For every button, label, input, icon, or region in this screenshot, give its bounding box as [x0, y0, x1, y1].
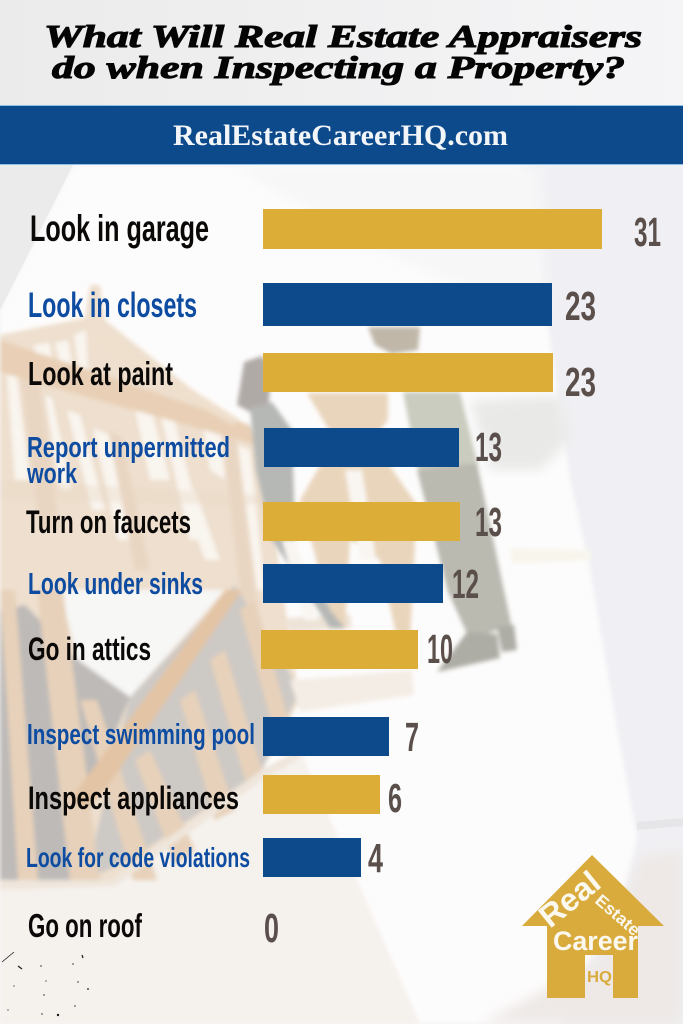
logo: Real Estate Career HQ house: Estate: [591, 891, 644, 940]
row: report unpermitted work: Report unpermitted: [27, 432, 230, 464]
row: look at paint: [28, 353, 596, 405]
logo: Real Estate Career HQ house: Career: [553, 926, 638, 956]
row: inspect swimming pool: 7: [405, 714, 419, 760]
row: look under sinks: 12: [452, 561, 479, 607]
title: [44, 18, 642, 85]
row: look for code violations: [26, 835, 383, 881]
woman with dark hair: [237, 356, 272, 412]
row: look in garage: Look in garage: [30, 208, 209, 249]
row: look in closets: [28, 283, 596, 329]
row: look at paint: 23: [565, 359, 596, 405]
row: turn on faucets: [26, 499, 502, 545]
row: go in attics: 10: [427, 626, 453, 672]
row: look at paint: Look at paint: [28, 355, 173, 392]
row: go on roof: [28, 905, 279, 951]
logo: Real Estate Career HQ house: [522, 855, 664, 998]
website banner: [0, 105, 683, 165]
man in work clothes: [368, 327, 420, 354]
bar chart: [26, 208, 661, 951]
row: look for code violations: Look for code violations: [26, 842, 250, 873]
light beam on wall and floor: [0, 165, 637, 1024]
row: inspect swimming pool: Inspect swimming pool: [27, 719, 255, 751]
logo: Real Estate Career HQ house: HQ: [587, 969, 612, 986]
website banner: RealEstateCareerHQ.com: [173, 119, 508, 152]
row: inspect appliances: Inspect appliances: [28, 780, 239, 816]
row: go in attics: [28, 626, 453, 672]
logo: Real Estate Career HQ house: Real: [532, 864, 607, 934]
row: inspect appliances: [28, 775, 402, 821]
row: look under sinks: [28, 561, 479, 607]
tree outside window: [470, 395, 570, 470]
floor speckles: [2, 952, 89, 1016]
upper steps: [287, 614, 352, 632]
lower balusters: [0, 590, 290, 880]
title: What Will Real Estate Appraisers: [44, 18, 642, 54]
row: look under sinks: Look under sinks: [28, 566, 203, 601]
row: go on roof: 0: [264, 905, 279, 951]
row: look for code violations: 4: [368, 835, 383, 881]
row: turn on faucets: 13: [475, 499, 502, 545]
row: report unpermitted work: work: [26, 458, 78, 490]
blonde woman: [300, 393, 417, 640]
row: inspect appliances: 6: [388, 775, 402, 821]
front handrail: [0, 340, 264, 447]
row: look in garage: 31: [634, 209, 661, 255]
row: report unpermitted work: 13: [475, 424, 502, 470]
row: go on roof: Go on roof: [28, 907, 143, 944]
row: look in closets: Look in closets: [28, 286, 197, 325]
row: report unpermitted work: [26, 424, 502, 490]
row: turn on faucets: Turn on faucets: [26, 504, 191, 540]
row: go in attics: Go in attics: [28, 631, 151, 667]
title: do when Inspecting a Property?: [52, 49, 625, 85]
staircase balusters and rails: [0, 285, 414, 890]
row: look in garage: [30, 208, 661, 255]
row: inspect swimming pool: [27, 714, 419, 760]
gray under stairs: [0, 605, 130, 880]
row: look in closets: 23: [565, 283, 596, 329]
